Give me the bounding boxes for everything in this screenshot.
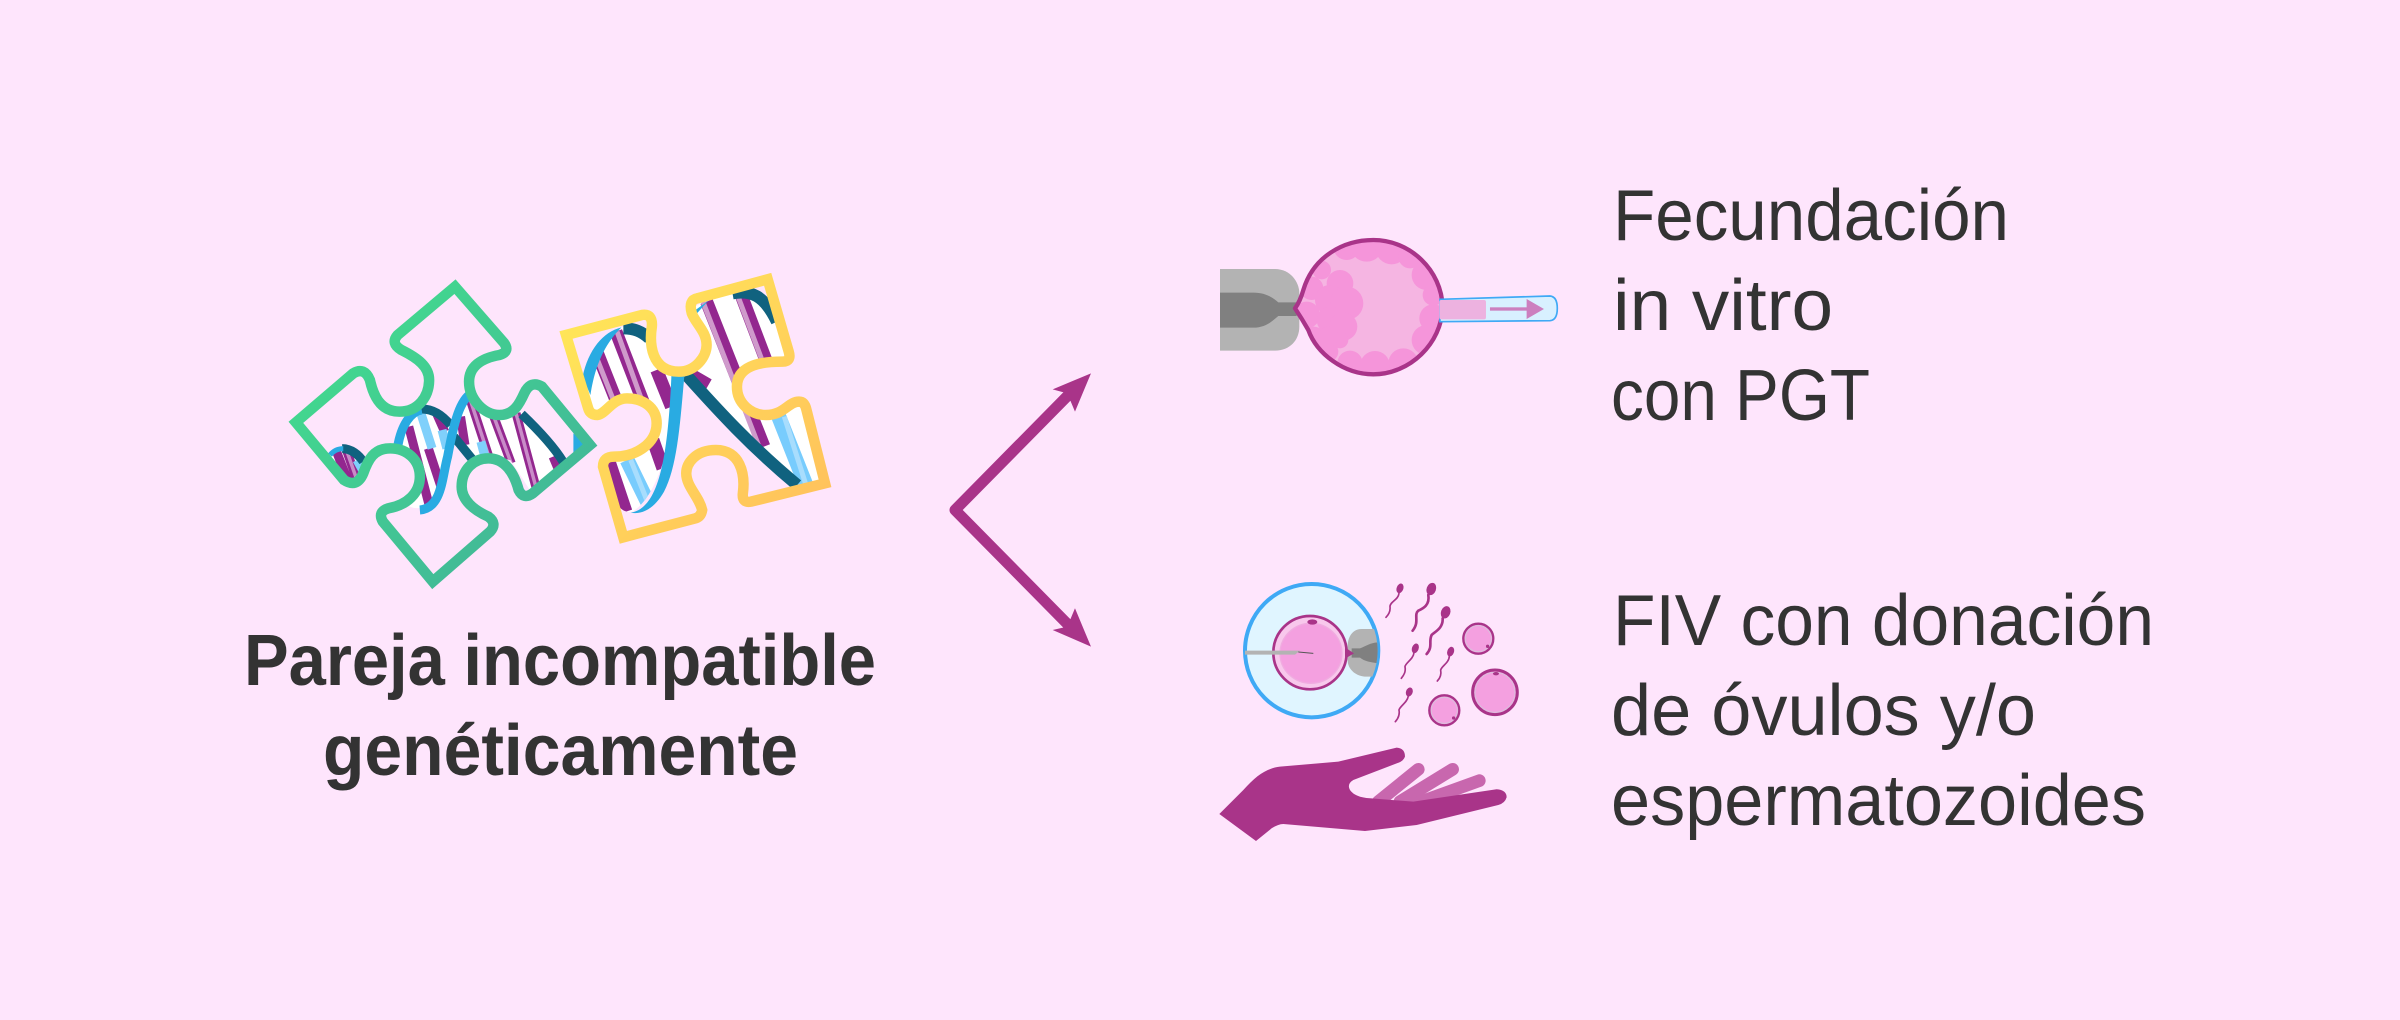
green puzzle piece with DNA xyxy=(296,287,590,582)
text: FIV con donación de óvulos y/o espermatozoides xyxy=(1611,581,2154,841)
heading: Pareja incompatible genéticamente: Pareja incompatible xyxy=(244,621,876,701)
text: Fecundación in vitro con PGT: con PGT xyxy=(1611,356,1870,436)
heading: Pareja incompatible genéticamente: genéticamente xyxy=(323,711,798,791)
dish with microinjected egg xyxy=(1245,584,1380,717)
sperm cells xyxy=(1386,581,1455,722)
text: Fecundación in vitro con PGT: Fecundación xyxy=(1613,176,2009,256)
icon: in vitro fertilisation with PGT embryo biopsy xyxy=(1220,228,1557,381)
donated eggs xyxy=(1429,624,1517,725)
biopsy pipette with arrow xyxy=(1439,296,1557,322)
text: Fecundación in vitro con PGT xyxy=(1611,176,2009,436)
arrow: branching to two options xyxy=(955,373,1091,647)
icon: incompatible DNA puzzle pieces xyxy=(296,279,829,582)
holding pipette xyxy=(1220,269,1299,351)
heading: Pareja incompatible genéticamente xyxy=(244,621,876,791)
blastocyst embryo xyxy=(1292,238,1444,376)
icon: IVF with donated eggs and sperm on a hand xyxy=(1219,581,1517,841)
yellow puzzle piece with DNA xyxy=(566,279,829,540)
text: FIV con donación de óvulos y/o espermatozoides: de óvulos y/o xyxy=(1611,671,2036,751)
infographic canvas xyxy=(248,186,2150,841)
donor hand xyxy=(1219,748,1507,841)
text: FIV con donación de óvulos y/o espermatozoides: espermatozoides xyxy=(1611,761,2146,841)
text: Fecundación in vitro con PGT: in vitro xyxy=(1613,266,1833,346)
text: FIV con donación de óvulos y/o espermatozoides: FIV con donación xyxy=(1613,581,2154,661)
